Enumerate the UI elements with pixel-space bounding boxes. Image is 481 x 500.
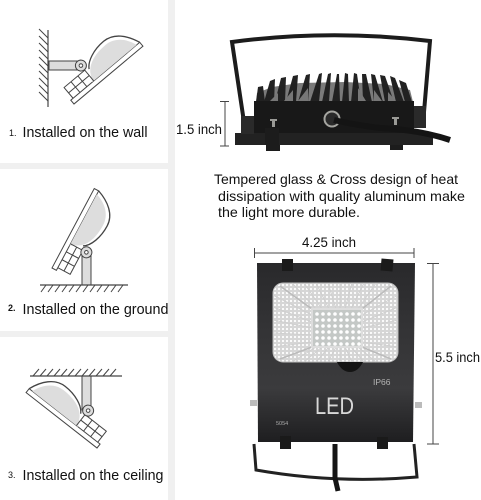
sensor bump — [337, 362, 363, 372]
panel: ceiling installation: Installed on the ceiling — [22, 468, 164, 484]
fin highlights — [270, 88, 396, 101]
cable gland — [324, 112, 340, 126]
dimension: 5.5 inch: 5.5 inch — [435, 350, 480, 365]
clips — [265, 128, 280, 151]
panel: wall installation: Installed on the wall — [22, 125, 148, 141]
dimension: 4.25 inch: 4.25 inch — [302, 234, 356, 250]
bracket side knobs — [241, 106, 426, 134]
dimension: 5.5 inch — [427, 264, 480, 444]
caption: wall: 1. — [9, 128, 17, 138]
lens reflector — [273, 283, 398, 362]
dimension: 1.5 inch: 1.5 inch — [176, 122, 222, 137]
icon: ground mount diagram — [40, 189, 128, 292]
LED label: LED — [315, 393, 354, 420]
panel: wall installation — [9, 23, 148, 141]
panel backgrounds: separators — [0, 0, 175, 500]
side screws — [250, 400, 422, 408]
screws — [270, 117, 399, 127]
heat sink body — [254, 101, 414, 134]
panel: ground installation: Installed on the ground — [22, 302, 168, 318]
photo: rear view of flood light — [232, 35, 450, 151]
lower bracket — [254, 444, 417, 479]
housing clips — [280, 258, 394, 449]
description text — [214, 171, 465, 220]
description text: dissipation with quality aluminum make — [218, 188, 465, 204]
dimension: 4.25 inch — [254, 234, 414, 258]
LED array — [312, 309, 362, 347]
dimension: 1.5 inch — [176, 102, 229, 146]
panel: ground installation — [8, 189, 168, 318]
description text: Tempered glass & Cross design of heat — [214, 171, 458, 187]
housing — [257, 263, 415, 442]
icon: wall mount diagram — [39, 23, 143, 107]
caption: ground: 2. — [8, 303, 16, 313]
base plate — [235, 133, 433, 145]
icon: ceiling mount diagram — [26, 369, 122, 448]
description text: the light more durable. — [218, 204, 360, 220]
power cable — [335, 444, 338, 491]
IP66 label: IP66 — [373, 377, 391, 387]
mounting bracket — [232, 35, 430, 122]
photo: front view of flood light — [250, 258, 422, 491]
model label: 5054 — [276, 421, 288, 427]
heat sink fins — [256, 73, 413, 102]
caption: ceiling: 3. — [8, 470, 16, 480]
panel: ceiling installation — [8, 369, 164, 484]
power cable — [334, 120, 450, 140]
